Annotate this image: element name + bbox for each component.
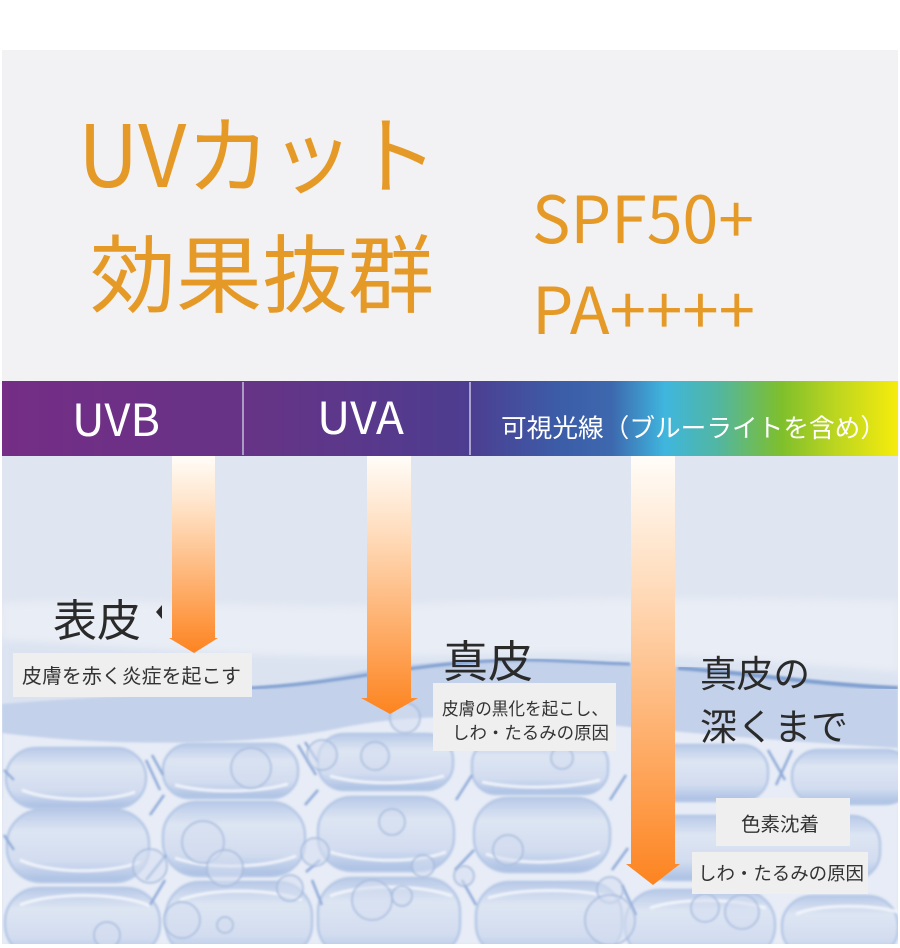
cell junctions	[4, 742, 792, 915]
title	[78, 87, 438, 331]
callout: wrinkles and sagging	[692, 852, 868, 894]
SPF and PA rating: SPF50+	[532, 168, 754, 262]
skin illustration	[2, 456, 900, 948]
label: deep dermis: 深くまで	[700, 697, 848, 751]
SPF and PA rating	[532, 168, 755, 353]
callout: pigmentation	[716, 798, 850, 846]
skin surface layers	[6, 604, 894, 666]
callout: UVB effect	[13, 653, 252, 697]
spectrum band	[2, 381, 898, 456]
arrow: visible light	[626, 456, 680, 885]
label: UVB: UVB	[72, 385, 160, 449]
header panel	[2, 50, 898, 381]
bubbles	[94, 703, 759, 948]
label: visible light: 可視光線（ブルーライトを含め）	[501, 408, 886, 445]
label: deep dermis: 真皮の	[700, 644, 810, 698]
label: UVA: UVA	[317, 383, 404, 447]
callout: pigmentation: 色素沈着	[741, 808, 819, 837]
callout: UVA effect: しわ・たるみの原因	[452, 720, 609, 745]
title: UVカット	[78, 87, 438, 212]
SPF and PA rating: PA++++	[532, 259, 755, 353]
label: deep dermis	[700, 644, 848, 751]
callout: UVB effect: 皮膚を赤く炎症を起こす	[22, 660, 241, 689]
arrow: UVA	[361, 456, 418, 714]
label: dermis: 真皮	[443, 626, 533, 690]
callout: wrinkles and sagging: しわ・たるみの原因	[698, 860, 864, 886]
label: epidermis: 表皮	[53, 585, 141, 649]
clipped glyph fragment	[156, 605, 162, 619]
epidermal and dermal cells	[4, 734, 900, 948]
callout: UVA effect	[433, 683, 616, 751]
callout: UVA effect: 皮膚の黒化を起こし、	[442, 696, 608, 721]
arrow: UVB	[169, 456, 218, 653]
title: 効果抜群	[90, 208, 434, 331]
cell highlights	[20, 776, 898, 914]
